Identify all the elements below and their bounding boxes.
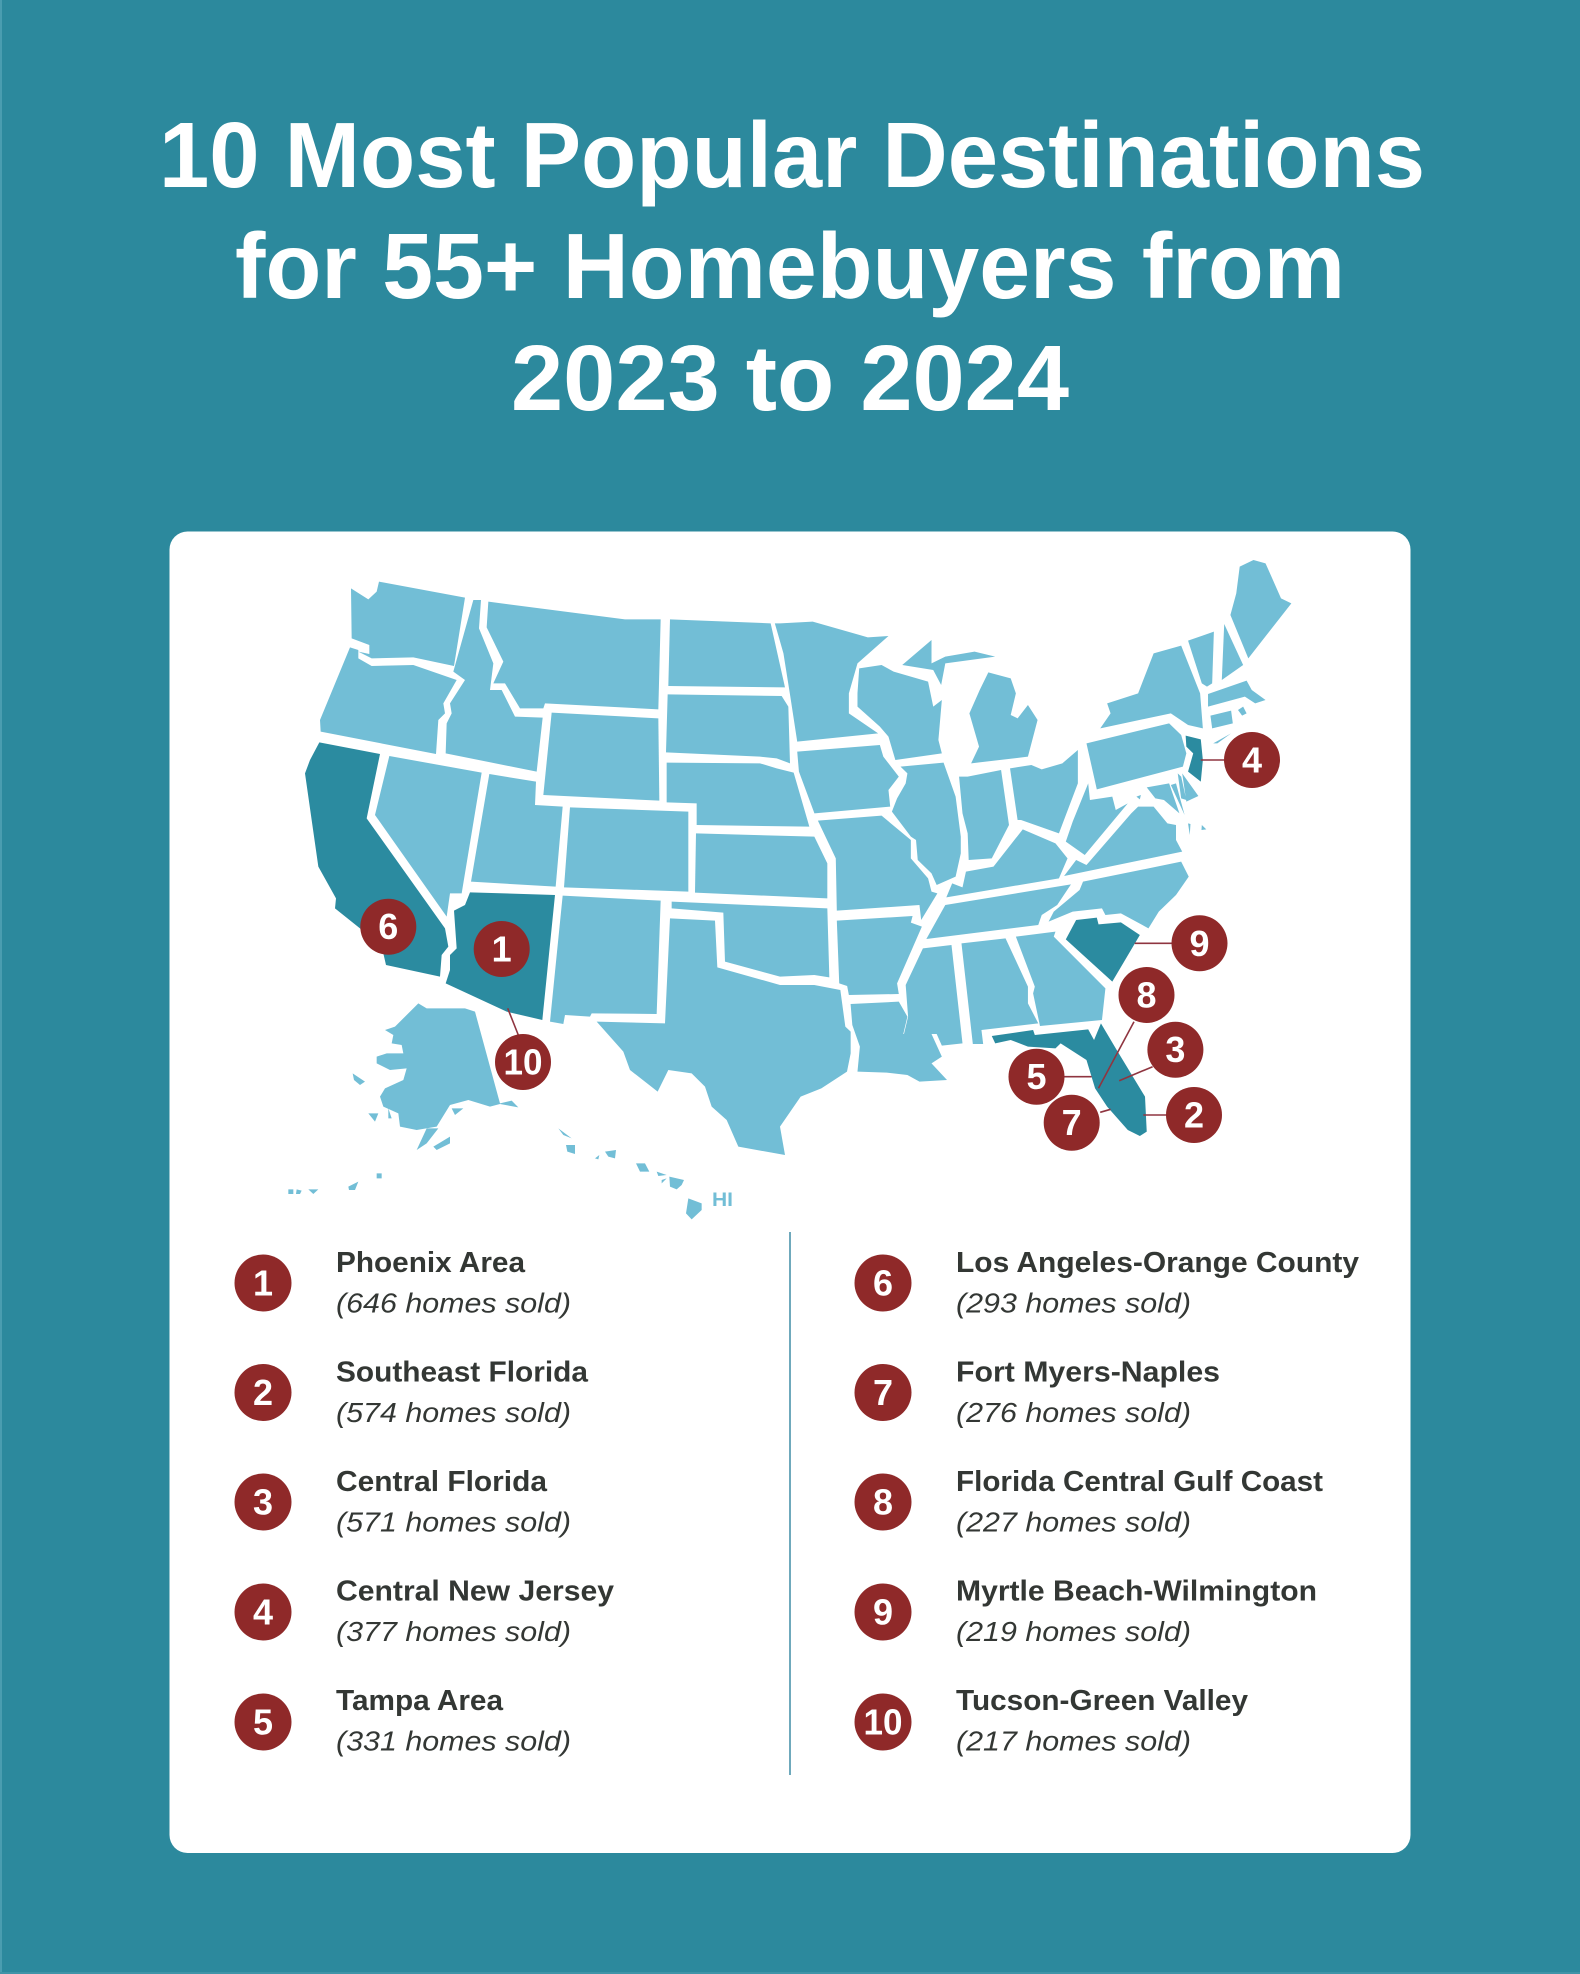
state: Georgia	[1016, 932, 1105, 1026]
state: New Hampshire	[1222, 624, 1243, 680]
state: Utah	[471, 774, 563, 887]
legend item 6: Los Angeles-Orange County	[956, 1247, 1359, 1279]
legend item 4: 4	[253, 1592, 273, 1632]
legend item 7	[854, 1356, 1220, 1428]
state: Idaho	[446, 600, 543, 772]
state: Connecticut	[1210, 711, 1233, 728]
legend: left column	[234, 1247, 614, 1756]
state: New York	[1100, 646, 1203, 728]
legend item 2: (574 homes sold)	[336, 1397, 571, 1428]
legend item 2: Southeast Florida	[336, 1356, 589, 1388]
legend item 9: 9	[873, 1592, 893, 1632]
state: Tennessee	[926, 884, 1071, 939]
state: Pennsylvania	[1086, 723, 1186, 789]
state: Rhode Island	[1238, 707, 1247, 716]
legend item 7: 7	[873, 1372, 893, 1413]
state: North Dakota	[668, 619, 785, 687]
state: Alaska	[377, 1003, 518, 1130]
panel: white card	[170, 532, 1410, 1853]
state: Wyoming	[543, 713, 659, 801]
state: Michigan lower peninsula	[969, 672, 1038, 763]
marker 3	[1147, 1022, 1203, 1078]
legend item 10	[854, 1685, 1248, 1756]
marker 8: 8	[1136, 974, 1157, 1016]
legend: right column	[854, 1247, 1359, 1756]
state: Michigan upper peninsula	[902, 640, 995, 685]
state: Maryland	[1147, 783, 1179, 813]
legend item 3: 3	[253, 1482, 273, 1522]
legend item 3: Central Florida	[336, 1466, 548, 1498]
state: Virginia	[1064, 807, 1182, 876]
legend item 10: 10	[864, 1702, 902, 1742]
state: Ohio	[1010, 750, 1078, 833]
state: Illinois	[892, 763, 961, 885]
marker 7	[1044, 1095, 1100, 1151]
state: New Jersey	[1186, 736, 1203, 782]
legend item 1: (646 homes sold)	[336, 1288, 571, 1318]
leader line: 7	[1100, 1109, 1111, 1112]
legend item 7: Fort Myers-Naples	[956, 1356, 1220, 1388]
legend item 5: 5	[253, 1702, 273, 1742]
state: Oklahoma	[672, 902, 829, 977]
legend item 3: (571 homes sold)	[336, 1506, 571, 1538]
state: Texas	[597, 918, 851, 1155]
legend item 1	[234, 1247, 571, 1318]
state: Arkansas	[837, 916, 922, 995]
state: South Dakota	[666, 694, 790, 763]
leader line: 10	[508, 1008, 518, 1035]
legend item 4	[234, 1576, 614, 1647]
marker 1	[474, 921, 530, 977]
legend item 5: (331 homes sold)	[336, 1726, 571, 1756]
state: Arizona	[446, 892, 555, 1020]
title: 10 Most Popular Destinations	[159, 103, 1425, 207]
legend item 7: (276 homes sold)	[956, 1397, 1191, 1428]
legend item 10: (217 homes sold)	[956, 1726, 1191, 1756]
state: Maine	[1230, 560, 1291, 658]
legend item 4: Central New Jersey	[336, 1576, 614, 1608]
state: Minnesota	[775, 622, 888, 742]
marker 10	[495, 1034, 551, 1090]
legend item 9: (219 homes sold)	[956, 1616, 1191, 1647]
marker 4: 4	[1242, 740, 1262, 780]
state: Washington	[351, 582, 465, 666]
marker 6: 6	[378, 906, 398, 947]
state: New Mexico	[550, 896, 661, 1024]
legend item 1: Phoenix Area	[336, 1247, 526, 1279]
legend item 8: (227 homes sold)	[956, 1506, 1191, 1538]
marker 6	[360, 899, 416, 955]
state: Nevada	[375, 756, 482, 917]
state: Mississippi	[904, 945, 963, 1046]
title	[159, 103, 1425, 430]
leader line: 2	[1143, 1114, 1167, 1116]
marker 4	[1224, 732, 1280, 788]
state: California	[305, 742, 448, 977]
state: Montana	[487, 602, 661, 709]
leader line: 5	[1064, 1076, 1092, 1078]
marker 7: 7	[1062, 1102, 1082, 1143]
marker 10: 10	[504, 1042, 542, 1082]
legend item 2: 2	[253, 1372, 273, 1413]
state: South Carolina	[1066, 918, 1140, 982]
state: Missouri	[818, 816, 937, 920]
state: Delaware and shore	[1136, 773, 1206, 835]
legend item 5: Tampa Area	[336, 1685, 504, 1717]
state: Wisconsin	[857, 665, 942, 760]
legend item 8: Florida Central Gulf Coast	[956, 1466, 1323, 1498]
marker 8	[1118, 967, 1174, 1023]
label: HI: HI	[712, 1190, 733, 1211]
marker 5: 5	[1026, 1056, 1047, 1097]
state: Florida	[992, 1023, 1147, 1136]
leader line: 8	[1098, 1022, 1134, 1088]
legend item 3	[234, 1466, 571, 1538]
legend item 4: (377 homes sold)	[336, 1616, 571, 1647]
state: Hawaii	[558, 1128, 702, 1219]
legend item 2	[234, 1356, 589, 1428]
marker 1: 1	[492, 928, 512, 970]
marker 9: 9	[1189, 923, 1210, 964]
state: Nebraska	[667, 763, 809, 827]
state: North Carolina	[1049, 862, 1189, 928]
marker 5	[1008, 1049, 1064, 1105]
state: Massachusetts	[1208, 681, 1266, 707]
title: for 55+ Homebuyers from	[235, 214, 1345, 318]
title: 2023 to 2024	[511, 326, 1069, 430]
marker 3: 3	[1165, 1029, 1185, 1070]
state: Vermont	[1188, 632, 1214, 687]
legend item 9	[854, 1576, 1317, 1647]
marker 2	[1166, 1087, 1222, 1143]
state: Oregon	[320, 647, 457, 754]
legend item 10: Tucson-Green Valley	[956, 1685, 1248, 1717]
legend divider	[789, 1232, 791, 1775]
state: Alabama	[961, 938, 1038, 1044]
state: Indiana	[959, 770, 1009, 860]
Long Island	[1213, 733, 1231, 743]
leader line: 4	[1201, 759, 1224, 761]
legend item 8	[854, 1466, 1323, 1538]
legend item 6: 6	[873, 1262, 893, 1304]
legend item 6	[854, 1247, 1359, 1318]
state: Kentucky	[946, 829, 1068, 897]
legend item 9: Myrtle Beach-Wilmington	[956, 1576, 1317, 1608]
legend item 8: 8	[873, 1482, 893, 1522]
map markers	[360, 732, 1280, 1151]
leader line: 3	[1119, 1067, 1153, 1081]
legend item 5	[234, 1685, 571, 1756]
map of the United States	[288, 560, 1291, 1219]
state: Kansas	[695, 833, 827, 898]
marker 2: 2	[1184, 1094, 1204, 1136]
state: Colorado	[564, 807, 688, 892]
legend item 6: (293 homes sold)	[956, 1288, 1191, 1318]
state: Louisiana	[851, 1002, 947, 1082]
marker 9	[1172, 915, 1228, 971]
leader line: 9	[1135, 942, 1173, 944]
legend item 1: 1	[253, 1262, 273, 1304]
state: West Virginia	[1066, 783, 1128, 855]
state: Iowa	[797, 745, 899, 813]
Alaska islands	[288, 1073, 463, 1194]
